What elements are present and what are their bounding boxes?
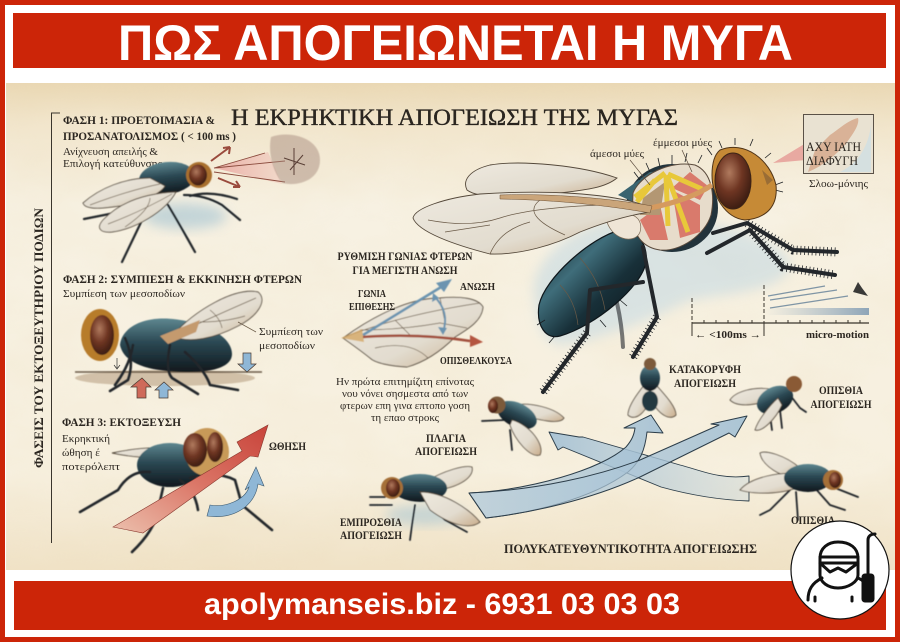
escape inset box: ΔΙΑΦΥΓΗ — [806, 154, 858, 168]
wing angle heading: ΓΙΑ ΜΕΓΙΣΤΗ ΑΝΩΣΗ — [352, 263, 458, 277]
phase 1 text: ΠΡΟΣΑΝΑΤΟΛΙΣΜΟΣ ( < 100 ms ) — [63, 129, 236, 143]
fly: phase 2 — [75, 291, 262, 394]
wing diagram labels: ΕΠΙΘΕΣΗΣ — [349, 301, 395, 313]
legs — [543, 223, 837, 392]
wing angle heading — [338, 249, 473, 277]
thorax back — [626, 164, 718, 252]
back legs — [617, 303, 623, 347]
wing diagram labels: ΑΝΩΣΗ — [460, 281, 495, 293]
fly: phase 1 — [83, 159, 240, 262]
escape inset box: Σλοω-μόνιης — [809, 178, 869, 190]
large fly with cutaway — [413, 138, 837, 392]
wing diagram note: φτερων επη γινα επτοπο γοση — [340, 400, 470, 412]
body hairs — [537, 138, 783, 343]
contact footer: apolymanseis.biz - 6931 03 03 03 — [204, 588, 680, 621]
take-off labels: ΑΠΟΓΕΙΩΣΗ — [674, 378, 736, 390]
lower wing — [413, 192, 650, 254]
phase 1 text: Ανίχνευση απειλής & — [63, 146, 158, 158]
wing diagram note: νου νόνει σησμεστα από των — [342, 388, 468, 400]
phase 1 text: Επιλογή κατεύθυνσης — [63, 158, 163, 170]
take-off labels: ΑΠΟΓΕΙΩΣΗ — [415, 446, 477, 458]
muscle labels: έμμεσοι μύες — [653, 137, 713, 149]
head — [712, 147, 776, 220]
wing diagram — [341, 279, 483, 367]
phase 3 text: Εκρηκτική — [62, 433, 110, 445]
take-off labels: ΠΛΑΓΙΑ — [426, 433, 467, 445]
blue thrust arrow — [207, 467, 264, 517]
indirect and direct muscles — [635, 173, 702, 232]
fly: rear take-off upper — [730, 376, 806, 430]
fly: vertical take-off — [628, 358, 676, 417]
arrows: phase 2 — [114, 353, 256, 398]
take-off labels: ΚΑΤΑΚΟΡΥΦΗ — [669, 364, 741, 376]
take-off labels: ΟΠΙΣΘΙΑ — [819, 385, 864, 397]
phase 2 text: ΦΑΣΗ 2: ΣΥΜΠΙΕΣΗ & ΕΚΚΙΝΗΣΗ ΦΤΕΡΩΝ — [63, 272, 302, 286]
wing diagram labels — [349, 281, 512, 367]
take-off labels — [340, 364, 872, 542]
phase 3 text — [62, 415, 182, 473]
timeline: ← <100ms → — [695, 329, 761, 341]
fly: lateral take-off — [482, 395, 564, 455]
thrust label: ΩΘΗΣΗ — [269, 439, 307, 453]
wing diagram note — [336, 376, 475, 424]
logo: pest control technician — [791, 521, 889, 619]
phase 3 text: ποτερόλεπτ — [62, 461, 121, 473]
abdomen — [538, 230, 646, 337]
watercolour shadow — [534, 215, 790, 345]
threat detection beam and target — [211, 135, 320, 187]
wing tendon — [650, 185, 712, 208]
callout: mid-leg compression: Συμπίεση των — [259, 326, 323, 338]
take-off labels: ΟΠΙΣΘΙΑ — [791, 515, 836, 527]
wing diagram note: Ην πρώτα επιτημίζιτη επίνοτας — [336, 376, 475, 388]
illustration title: Η ΕΚΡΗΚΤΙΚΗ ΑΠΟΓΕΙΩΣΗ ΤΗΣ ΜΥΓΑΣ — [231, 105, 678, 130]
vertical phases label: ΦΑΣΕΙΣ ΤΟΥ ΕΚΤΟΞΕΥΤΗΡΙΟΥ ΠΟΔΙΩΝ — [32, 208, 46, 468]
phase 2 text: Συμπίεση των μεσοποδίων — [63, 288, 185, 300]
phase 1 text — [63, 113, 236, 170]
take-off labels: ΑΠΟΓΕΙΩΣΗ — [340, 530, 402, 542]
cutaway thorax — [632, 164, 713, 250]
take-off labels: ΕΜΠΡΟΣΘΙΑ — [340, 517, 403, 529]
contact footer — [14, 581, 886, 630]
callout: mid-leg compression — [238, 322, 323, 352]
cream sac — [606, 213, 641, 239]
escape inset box: ΑΧΥ ΙΑΤΗ — [806, 140, 861, 154]
wing angle heading: ΡΥΘΜΙΣΗ ΓΩΝΙΑΣ ΦΤΕΡΩΝ — [338, 249, 473, 263]
phase 3 text: ΦΑΣΗ 3: ΕΚΤΟΞΕΥΣΗ — [62, 415, 182, 429]
leg hairs — [543, 223, 837, 392]
wing diagram labels: ΟΠΙΣΘΕΛΚΟΥΣΑ — [440, 355, 512, 367]
upper wing — [466, 163, 617, 197]
muscle labels: άμεσοι μύες — [590, 148, 645, 160]
wing diagram note: τη επαο στροκς — [371, 412, 440, 424]
multidirectional arrows — [469, 415, 749, 518]
title banner: ΠΩΣ ΑΠΟΓΕΙΩΝΕΤΑΙ Η ΜΥΓΑ — [118, 15, 793, 71]
callout: mid-leg compression: μεσοποδίων — [259, 340, 315, 352]
fly: forward take-off — [370, 467, 480, 540]
phase 3 text: ώθηση έ — [62, 447, 100, 459]
multidirectional caption: ΠΟΛΥΚΑΤΕΥΘΥΝΤΙΚΟΤΗΤΑ ΑΠΟΓΕΙΩΣΗΣ — [504, 542, 757, 556]
escape inset box — [773, 114, 874, 190]
red thrust arrow — [113, 425, 268, 533]
timeline — [692, 282, 869, 341]
phase 2 text — [63, 272, 302, 300]
take-off labels: ΑΠΟΓΕΙΩΣΗ — [810, 399, 872, 411]
fly: rear take-off lower — [740, 452, 858, 520]
fly: phase 3 — [80, 428, 272, 552]
parchment panel — [6, 83, 895, 570]
ground: phase 2 — [75, 370, 255, 386]
muscle labels — [590, 137, 713, 185]
timeline: micro-motion — [806, 329, 869, 341]
phase 1 text: ΦΑΣΗ 1: ΠΡΟΕΤΟΙΜΑΣΙΑ & — [63, 113, 215, 127]
phases bracket — [52, 113, 60, 543]
wing diagram labels: ΓΩΝΙΑ — [358, 288, 386, 300]
